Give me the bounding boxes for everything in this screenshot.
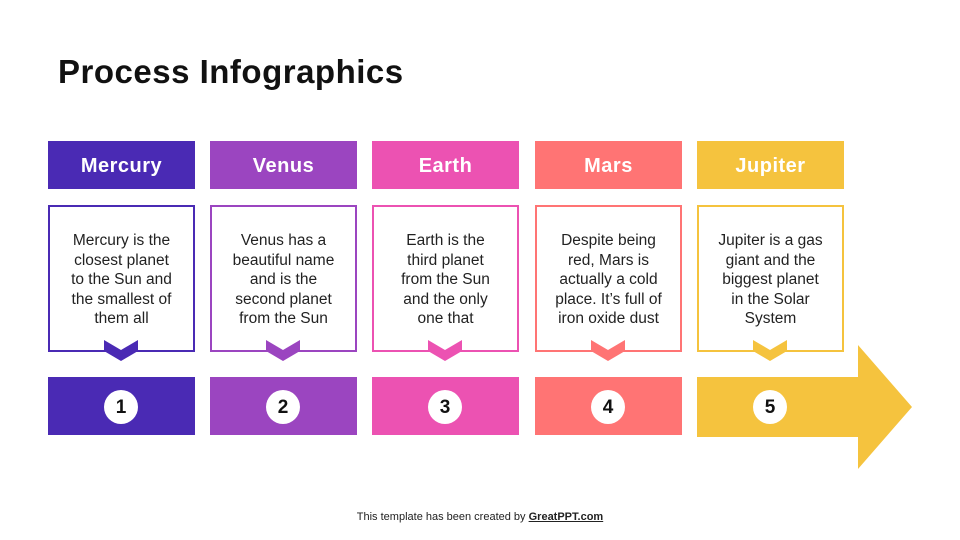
step 5 text box: in the Solar bbox=[731, 290, 810, 308]
title: Process Infographics bbox=[58, 53, 404, 90]
step 1 text box: to the Sun and bbox=[71, 271, 172, 288]
step 3 text box bbox=[372, 205, 519, 352]
step 1 number bar bbox=[48, 377, 195, 435]
step 5 text box: System bbox=[745, 310, 796, 327]
step 1 header: Mercury bbox=[81, 155, 162, 177]
step 3 text box: from the Sun bbox=[401, 271, 490, 288]
step 4 number bar bbox=[535, 377, 682, 435]
step 3 text box: third planet bbox=[407, 252, 484, 268]
step 4 number bar: 4 bbox=[603, 397, 613, 418]
step 5 text box: Jupiter is a gas bbox=[718, 232, 823, 249]
step 2 text box: beautiful name bbox=[233, 252, 334, 268]
step 2 text box: second planet bbox=[235, 290, 332, 308]
step 1 text box bbox=[48, 205, 195, 352]
step 1 number bar: 1 bbox=[116, 397, 126, 418]
step 1 text box: them all bbox=[94, 310, 149, 327]
step 5 number: 5 bbox=[765, 397, 775, 418]
step 1 header bbox=[48, 141, 195, 189]
step 5 text box: biggest planet bbox=[722, 271, 819, 288]
step 3 number bar: 3 bbox=[440, 397, 450, 418]
step 5 header bbox=[697, 141, 844, 189]
step 3 header: Earth bbox=[419, 155, 472, 177]
step 3 text box: one that bbox=[417, 310, 474, 327]
step 2 text box: Venus has a bbox=[241, 232, 326, 249]
step 3 text box: Earth is the bbox=[406, 232, 485, 249]
step 2 text box bbox=[210, 205, 357, 352]
step 1 text box: Mercury is the bbox=[73, 232, 170, 249]
step 4 header bbox=[535, 141, 682, 189]
step 4 text box: iron oxide dust bbox=[558, 310, 659, 327]
footer: This template has been created by GreatPPT.com bbox=[357, 511, 603, 523]
step 1 text box: the smallest of bbox=[72, 290, 171, 308]
step 4 text box bbox=[535, 205, 682, 352]
step 2 header: Venus bbox=[253, 155, 314, 177]
step 5 header: Jupiter bbox=[735, 155, 806, 177]
step 3 header bbox=[372, 141, 519, 189]
step 3 number bar bbox=[372, 377, 519, 435]
step 4 text box: Despite being bbox=[561, 232, 656, 249]
step 2 text box: from the Sun bbox=[239, 310, 328, 327]
step 5 text box bbox=[697, 205, 844, 352]
step 1 text box: closest planet bbox=[74, 252, 169, 268]
step 2 number bar bbox=[210, 377, 357, 435]
step 4 text box: place. It’s full of bbox=[555, 290, 662, 308]
step 2 number bar: 2 bbox=[278, 397, 288, 418]
step 2 text box: and is the bbox=[250, 271, 317, 288]
step 4 text box: red, Mars is bbox=[568, 252, 649, 268]
step 2 header bbox=[210, 141, 357, 189]
step 4 text box: actually a cold bbox=[559, 271, 658, 288]
step 4 header: Mars bbox=[584, 155, 633, 177]
step 5 text box: giant and the bbox=[726, 252, 815, 268]
step 3 text box: and the only bbox=[403, 290, 488, 308]
